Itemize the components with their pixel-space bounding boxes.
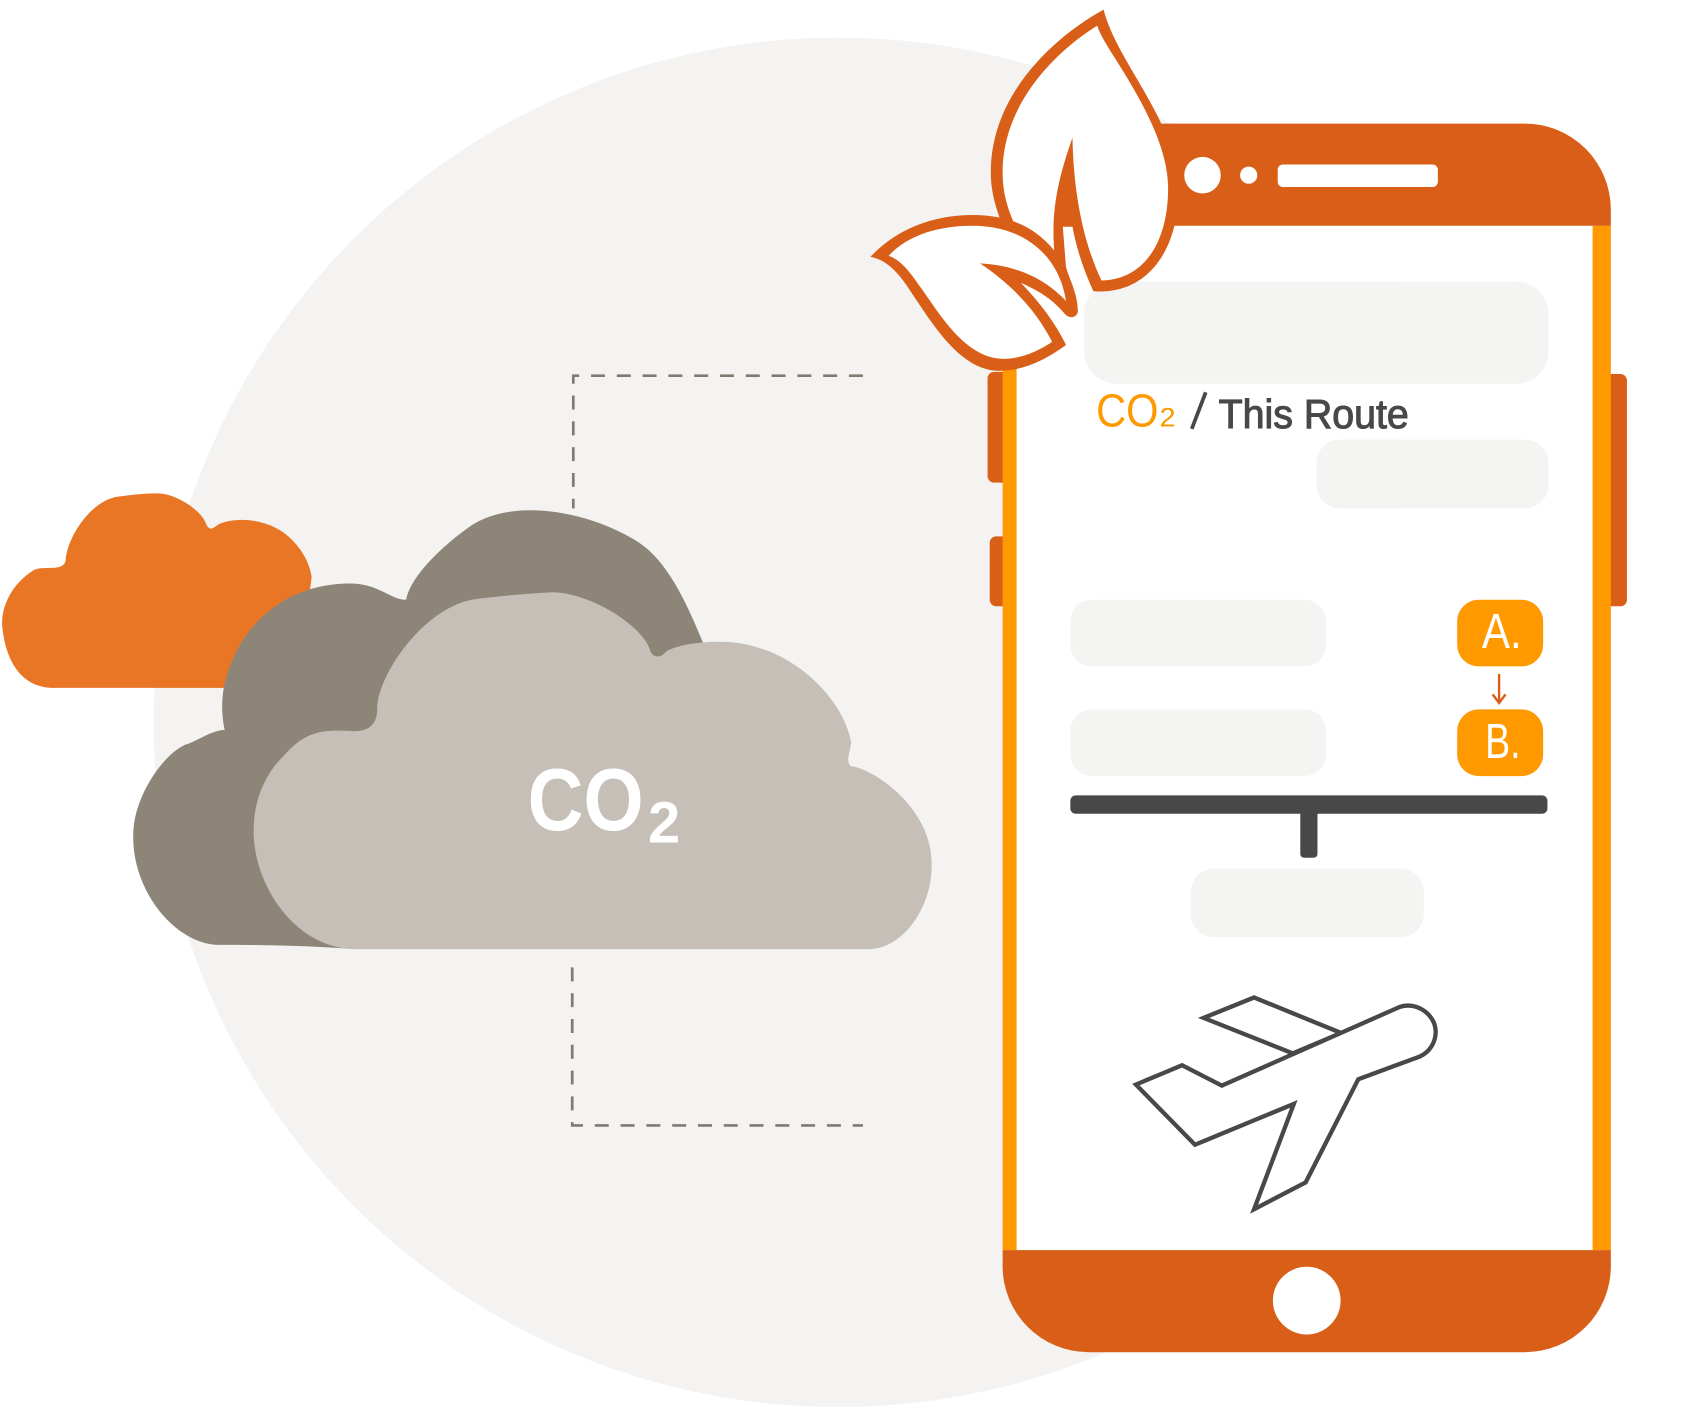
icon: light grey cloud with CO2 label: 2 xyxy=(648,791,680,856)
large leaf xyxy=(991,10,1177,322)
phone side edges xyxy=(1003,226,1611,1250)
divider bar with stem xyxy=(1070,795,1547,858)
panel: value placeholder xyxy=(1316,440,1549,508)
heading: CO2 per route: 2 xyxy=(1160,403,1176,433)
heading: CO2 per route xyxy=(1096,385,1409,437)
panel: top placeholder xyxy=(1084,282,1549,384)
icon: orange cloud xyxy=(2,493,312,688)
panel: origin placeholder xyxy=(1070,600,1326,666)
arrow: A to B xyxy=(1493,674,1506,703)
phone top bar xyxy=(1003,124,1611,226)
heading: CO2 per route: CO xyxy=(1096,385,1158,437)
CO2 label: CO xyxy=(528,750,644,849)
icon: leaves xyxy=(870,10,1177,371)
phone bottom bar xyxy=(1003,1250,1611,1352)
badge: A: A. xyxy=(1482,604,1522,659)
panel: result placeholder xyxy=(1191,869,1424,937)
phone camera and speaker xyxy=(1184,157,1438,193)
phone screen xyxy=(1017,226,1593,1250)
badge: B: B. xyxy=(1485,714,1521,769)
icon: light grey cloud with CO2 label xyxy=(254,592,932,949)
icon: airplane xyxy=(1136,997,1436,1209)
dashed bracket xyxy=(572,376,863,1125)
phone xyxy=(1003,124,1611,1352)
icon: dark grey cloud xyxy=(133,510,709,949)
small leaf xyxy=(870,215,1078,371)
heading: CO2 per route: This Route xyxy=(1219,391,1409,437)
badge: A xyxy=(1457,600,1543,666)
phone home button xyxy=(1273,1267,1341,1334)
badge: B xyxy=(1457,709,1543,776)
phone side buttons xyxy=(988,372,1627,606)
background circle xyxy=(154,38,1523,1407)
panel: destination placeholder xyxy=(1070,709,1326,776)
